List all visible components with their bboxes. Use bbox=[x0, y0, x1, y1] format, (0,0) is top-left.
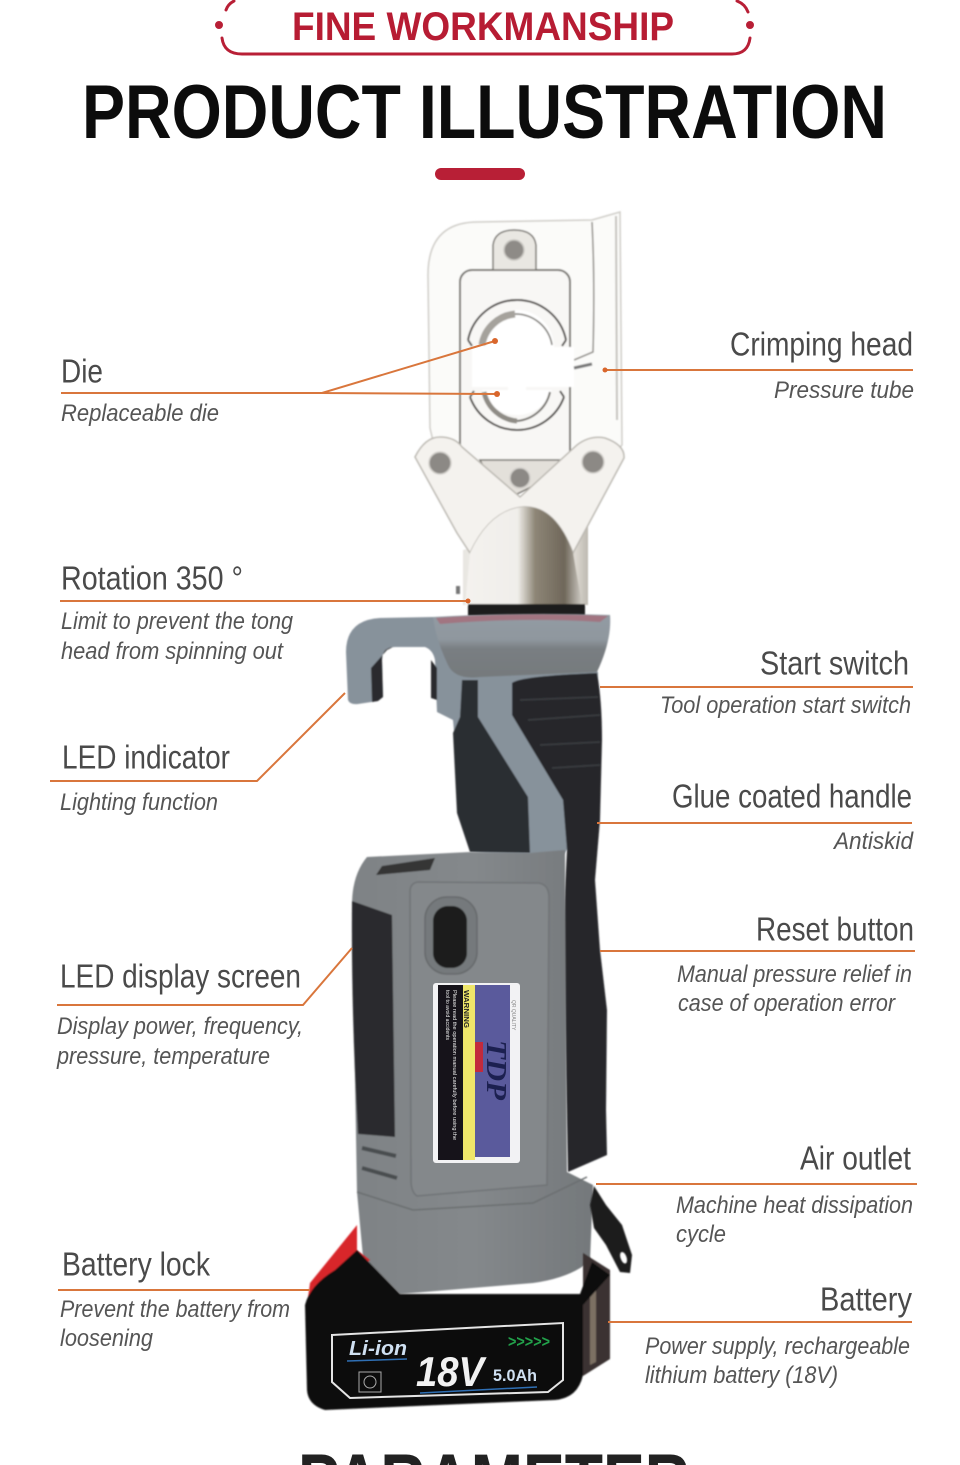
description: Limit to prevent the tong bbox=[61, 608, 294, 635]
description: case of operation error bbox=[678, 990, 896, 1017]
heading: Battery lock bbox=[62, 1246, 210, 1282]
description: Manual pressure relief in bbox=[677, 961, 912, 988]
callout: crimping head bbox=[602, 326, 914, 404]
heading: LED display screen bbox=[60, 958, 301, 994]
leader line bbox=[600, 950, 915, 952]
description: loosening bbox=[60, 1325, 154, 1352]
callout: start switch bbox=[600, 644, 913, 719]
banner frame bbox=[216, 1, 752, 54]
description: Lighting function bbox=[60, 789, 218, 816]
leader line bbox=[596, 1183, 917, 1185]
warning text: WARNING bbox=[462, 990, 469, 1029]
logo text: TDP bbox=[480, 1040, 511, 1101]
battery brand: Li-ion bbox=[349, 1338, 407, 1360]
icon: certification mark bbox=[359, 1372, 381, 1392]
heading: Crimping head bbox=[730, 326, 913, 362]
callout: reset button bbox=[600, 910, 915, 1017]
callout: battery lock bbox=[58, 1246, 310, 1352]
warning label: tool to avoid accidents bbox=[444, 990, 450, 1040]
callout: air outlet bbox=[596, 1140, 917, 1248]
voltage: 18V bbox=[416, 1348, 487, 1395]
description: head from spinning out bbox=[61, 638, 284, 665]
leader lines bbox=[61, 341, 497, 394]
description: Power supply, rechargeable bbox=[645, 1333, 910, 1360]
description: Machine heat dissipation bbox=[676, 1192, 913, 1219]
description: Replaceable die bbox=[61, 400, 219, 427]
description: Pressure tube bbox=[774, 377, 914, 404]
callout: battery bbox=[608, 1280, 912, 1389]
title accent pill bbox=[435, 168, 525, 180]
heading: Die bbox=[61, 352, 103, 390]
description bbox=[61, 608, 294, 665]
description: pressure, temperature bbox=[56, 1043, 270, 1070]
heading: Rotation 350 ° bbox=[61, 560, 243, 596]
description: cycle bbox=[676, 1221, 726, 1248]
description bbox=[676, 1192, 913, 1248]
heading: Air outlet bbox=[800, 1140, 911, 1176]
callout: led display screen bbox=[56, 948, 352, 1070]
warning label bbox=[433, 983, 520, 1163]
leader line bbox=[57, 948, 352, 1005]
description bbox=[677, 961, 912, 1017]
heading: Glue coated handle bbox=[672, 778, 912, 814]
leader line bbox=[608, 1321, 912, 1323]
warning label: QR QUALITY bbox=[510, 1000, 516, 1031]
description bbox=[56, 1013, 303, 1070]
leader line bbox=[60, 600, 468, 602]
capacity: 5.0Ah bbox=[493, 1366, 537, 1385]
crimping head bbox=[415, 212, 624, 616]
heading: Battery bbox=[820, 1280, 912, 1318]
strap loop bbox=[590, 1186, 632, 1273]
charge chevrons: >>>>> bbox=[508, 1332, 550, 1351]
heading: Reset button bbox=[756, 910, 914, 948]
leader line bbox=[50, 693, 345, 781]
banner: fine workmanship bbox=[216, 1, 752, 54]
handle and hook bbox=[346, 614, 610, 1172]
banner text: FINE WORKMANSHIP bbox=[292, 5, 674, 49]
description: Antiskid bbox=[832, 828, 914, 855]
description bbox=[645, 1333, 910, 1389]
callout: led indicator bbox=[50, 693, 345, 816]
heading: Start switch bbox=[760, 644, 909, 682]
description: Display power, frequency, bbox=[57, 1013, 303, 1040]
callout: glue coated handle bbox=[597, 778, 914, 855]
product photo: crimping tool bbox=[305, 212, 632, 1410]
callout: die bbox=[61, 338, 500, 427]
icon: power button bbox=[425, 897, 477, 974]
description bbox=[60, 1296, 290, 1352]
die circle bbox=[468, 300, 574, 430]
main body bbox=[352, 850, 593, 1294]
leader line bbox=[605, 369, 913, 371]
battery bbox=[305, 1225, 610, 1410]
leader line bbox=[600, 686, 913, 688]
callout: rotation bbox=[60, 560, 470, 665]
description: Tool operation start switch bbox=[660, 692, 911, 719]
leader line bbox=[58, 1289, 310, 1291]
heading: LED indicator bbox=[62, 738, 230, 776]
leader line bbox=[597, 822, 912, 824]
description: Prevent the battery from bbox=[60, 1296, 290, 1323]
warning label: Please read the operation manual carefully before using the bbox=[451, 990, 457, 1140]
description: lithium battery (18V) bbox=[645, 1362, 838, 1389]
